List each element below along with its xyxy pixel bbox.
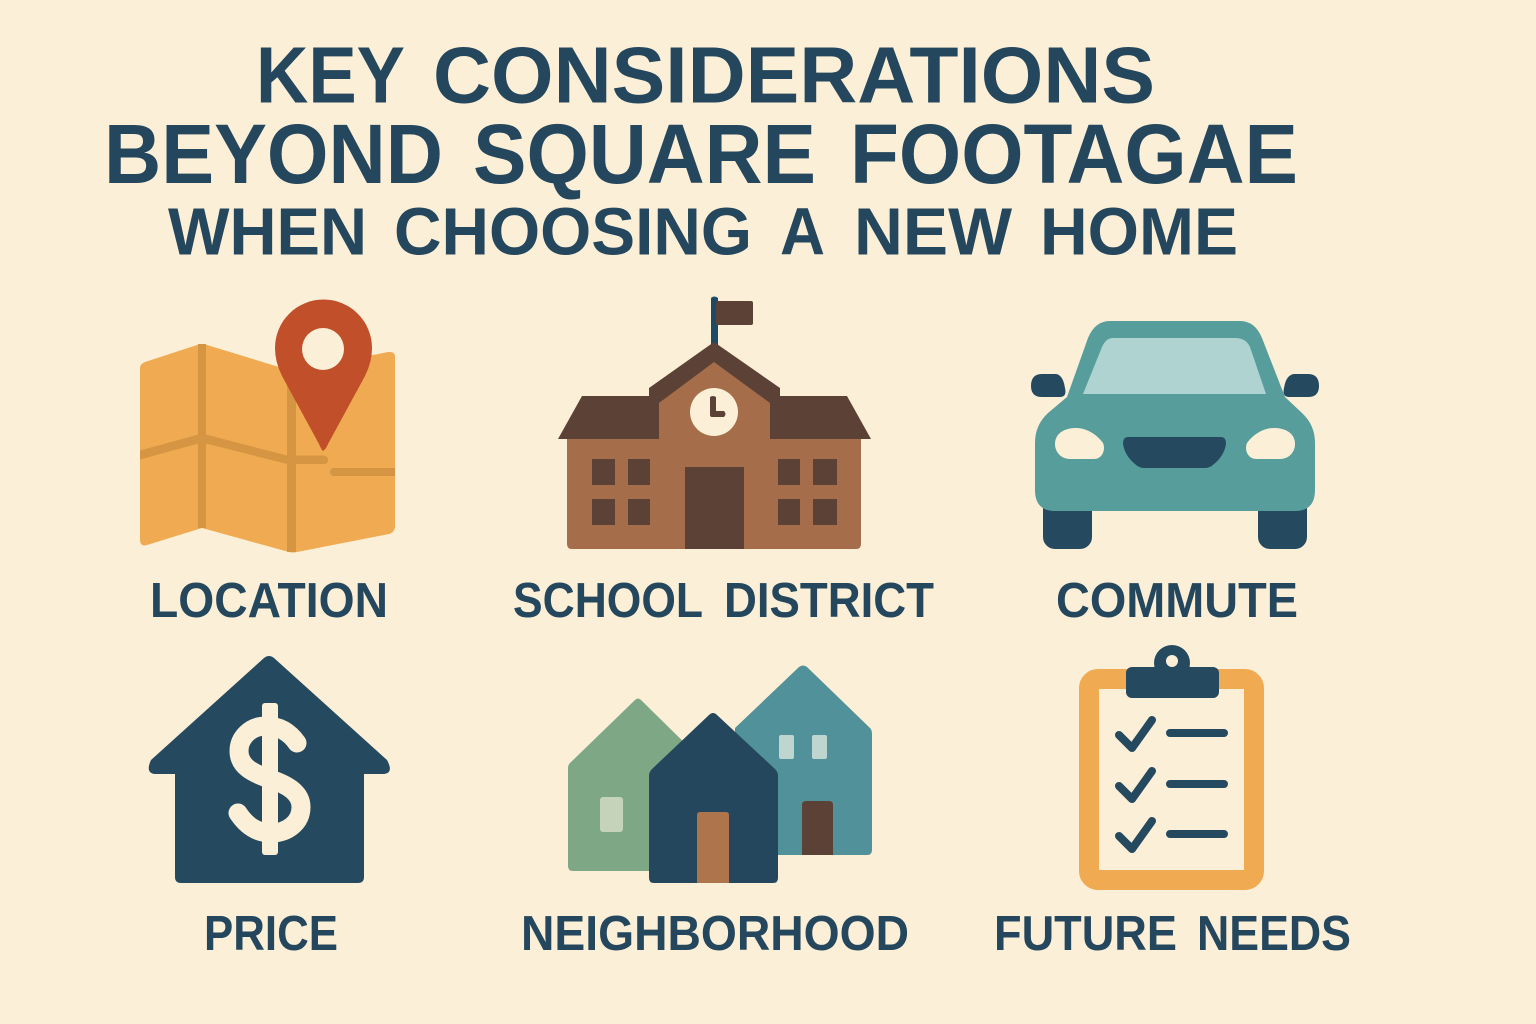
panel: school district	[513, 296, 934, 628]
label: neighborhood: NEIGHBORHOOD	[521, 907, 909, 961]
icon: map with pin	[140, 300, 395, 552]
label: location: LOCATION	[150, 574, 388, 628]
title: FOOTAGAE	[850, 107, 1298, 201]
title	[104, 30, 1298, 270]
label: future needs: NEEDS	[1197, 907, 1351, 961]
title: SQUARE	[473, 107, 816, 201]
panel: price	[149, 656, 390, 961]
title: A	[780, 194, 825, 270]
panel: location	[140, 300, 395, 628]
label: future needs	[994, 907, 1351, 961]
title: WHEN	[168, 194, 367, 270]
title: NEW	[854, 194, 1013, 270]
label: school district: DISTRICT	[724, 574, 934, 628]
icon: school building	[558, 296, 871, 549]
icon: clipboard checklist	[1089, 645, 1254, 880]
panel: commute	[1031, 321, 1319, 628]
label: commute: COMMUTE	[1056, 574, 1298, 628]
label: price: PRICE	[204, 907, 338, 961]
panel: future needs	[994, 645, 1351, 961]
title: BEYOND	[104, 107, 443, 201]
icon: house with dollar sign	[149, 656, 390, 883]
label: school district: SCHOOL	[513, 574, 703, 628]
title: CONSIDERATIONS	[433, 30, 1155, 120]
title: KEY	[256, 30, 405, 120]
label: school district	[513, 574, 934, 628]
title: CHOOSING	[394, 194, 752, 270]
icon: car	[1031, 321, 1319, 549]
label: future needs: FUTURE	[994, 907, 1177, 961]
title: HOME	[1040, 194, 1238, 270]
panel: neighborhood	[521, 666, 909, 961]
icon: three houses	[568, 666, 872, 883]
